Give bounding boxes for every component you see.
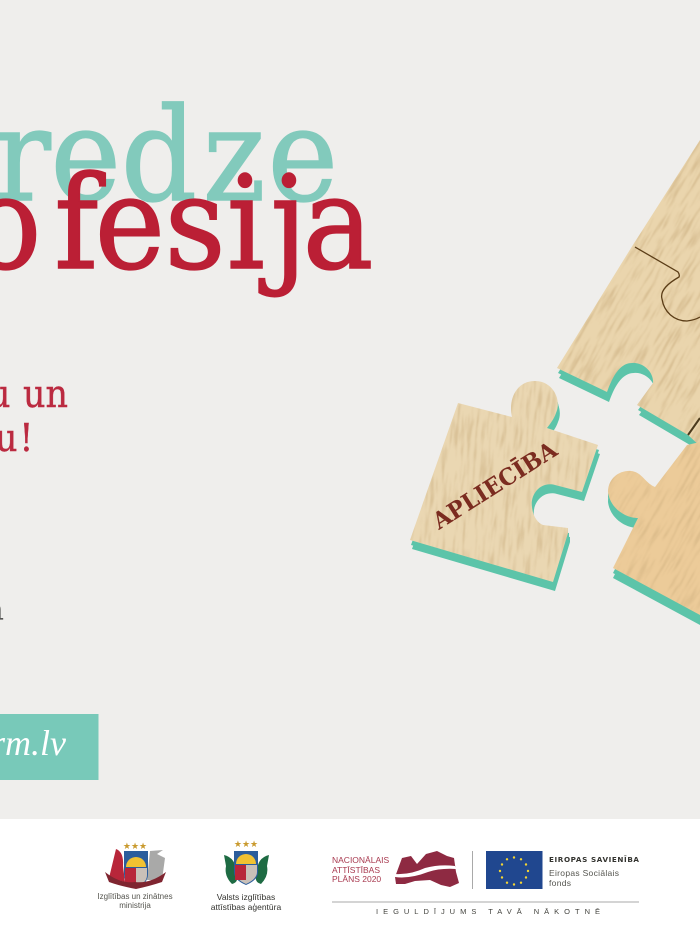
website button — [0, 714, 98, 780]
logo: agency coat of arms — [224, 840, 269, 885]
caption: ministry: Izglītības un zinātnes — [97, 892, 173, 901]
logo text: national development plan: ATTĪSTĪBAS — [332, 865, 380, 875]
caption: ministry — [97, 892, 173, 910]
eu text: fonds — [549, 878, 571, 888]
slogan: IEGULDĪJUMS TAVĀ NĀKOTNĒ — [376, 907, 600, 916]
divider — [472, 851, 473, 889]
logo: map of latvia — [395, 851, 459, 887]
logo text: national development plan: NACIONĀLAIS — [332, 855, 389, 865]
logo: eu flag — [486, 851, 542, 889]
engraved label: APLIECĪBA — [427, 436, 563, 536]
logo text: national development plan — [332, 855, 389, 884]
caption: agency: attīstības aģentūra — [211, 902, 281, 912]
caption: agency — [211, 892, 281, 912]
caption: agency: Valsts izglītības — [217, 892, 275, 902]
puzzle piece: lower right — [608, 442, 700, 625]
eu text: EIROPAS SAVIENĪBA — [549, 855, 639, 864]
logo text: national development plan: PLĀNS 2020 — [332, 874, 381, 884]
puzzle piece: upper right — [557, 140, 700, 444]
eu text: Eiropas Sociālais — [549, 868, 619, 878]
footer — [0, 819, 700, 933]
caption: ministry: ministrija — [119, 901, 151, 910]
heading — [0, 81, 373, 299]
logo: ministry coat of arms — [105, 842, 166, 889]
heading word: pieredze: redze — [0, 81, 338, 231]
eu text — [549, 855, 639, 888]
logo: ministry coat of arms: ★★★ — [123, 842, 147, 852]
logo: agency coat of arms: ★★★ — [234, 840, 258, 850]
puzzle piece: aplieciba — [410, 381, 600, 591]
subheading — [0, 372, 700, 460]
